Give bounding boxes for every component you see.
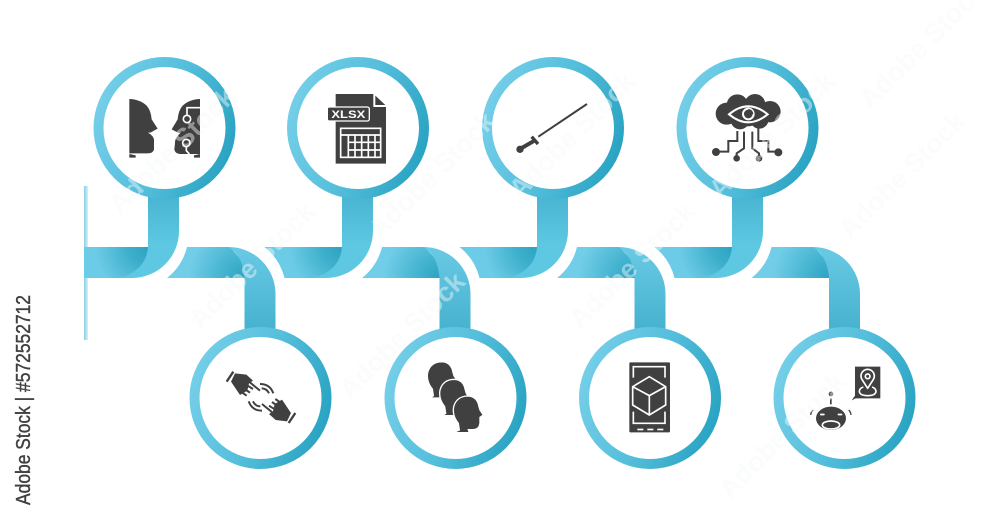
icon: row of three head silhouettes <box>427 362 483 433</box>
node 1: human and AI faces <box>98 62 230 194</box>
icon: cloud with eye and circuit lines <box>712 94 782 162</box>
node 6: three heads <box>390 332 522 464</box>
icon: facing human and robot heads <box>129 99 201 158</box>
node 5: robotic hands <box>194 332 326 464</box>
node 7: AR cube on phone <box>584 332 716 464</box>
connector ribbon 4 <box>362 247 470 335</box>
icon: smartphone with 3D cube <box>629 362 670 432</box>
node 4: cloud eye network <box>682 62 814 194</box>
watermarks: faint repeated stock text: Adobe Stock <box>703 66 842 204</box>
watermarks: faint repeated stock text: Adobe Stock <box>183 196 322 334</box>
icon: XLSX spreadsheet file: XLSX <box>331 109 366 121</box>
connector ribbon 2 <box>167 247 276 335</box>
watermarks: faint repeated stock text: Adobe Stock <box>503 66 642 204</box>
node 2: XLSX file <box>292 62 424 194</box>
node 3: sword <box>487 62 619 194</box>
watermarks: faint repeated stock text: Adobe Stock <box>333 266 472 404</box>
connector ribbon 8 <box>752 247 860 335</box>
watermarks: faint repeated stock text: Adobe Stock <box>363 106 502 244</box>
icon: two hands with signal arcs <box>227 372 295 423</box>
connector ribbon 1 <box>84 190 179 278</box>
connector ribbon 3 <box>264 190 373 278</box>
watermarks: faint repeated stock text: Adobe Stock <box>833 106 972 244</box>
icon: sword <box>516 104 587 153</box>
connector ribbon 6 <box>557 247 666 335</box>
vertical start bar <box>84 186 88 340</box>
icon: robot with map pin speech bubble <box>811 367 880 430</box>
watermarks: faint repeated stock text: Adobe Stock <box>713 366 852 504</box>
watermarks: faint repeated stock text: Adobe Stock <box>103 81 242 219</box>
watermarks: faint repeated stock text: Adobe Stock <box>563 196 702 334</box>
connector ribbon 5 <box>460 190 568 278</box>
stock image caption: Adobe Stock | #572552712 <box>13 295 35 505</box>
connector ribbon 7 <box>654 190 763 278</box>
node 8: robot with location <box>778 332 910 464</box>
